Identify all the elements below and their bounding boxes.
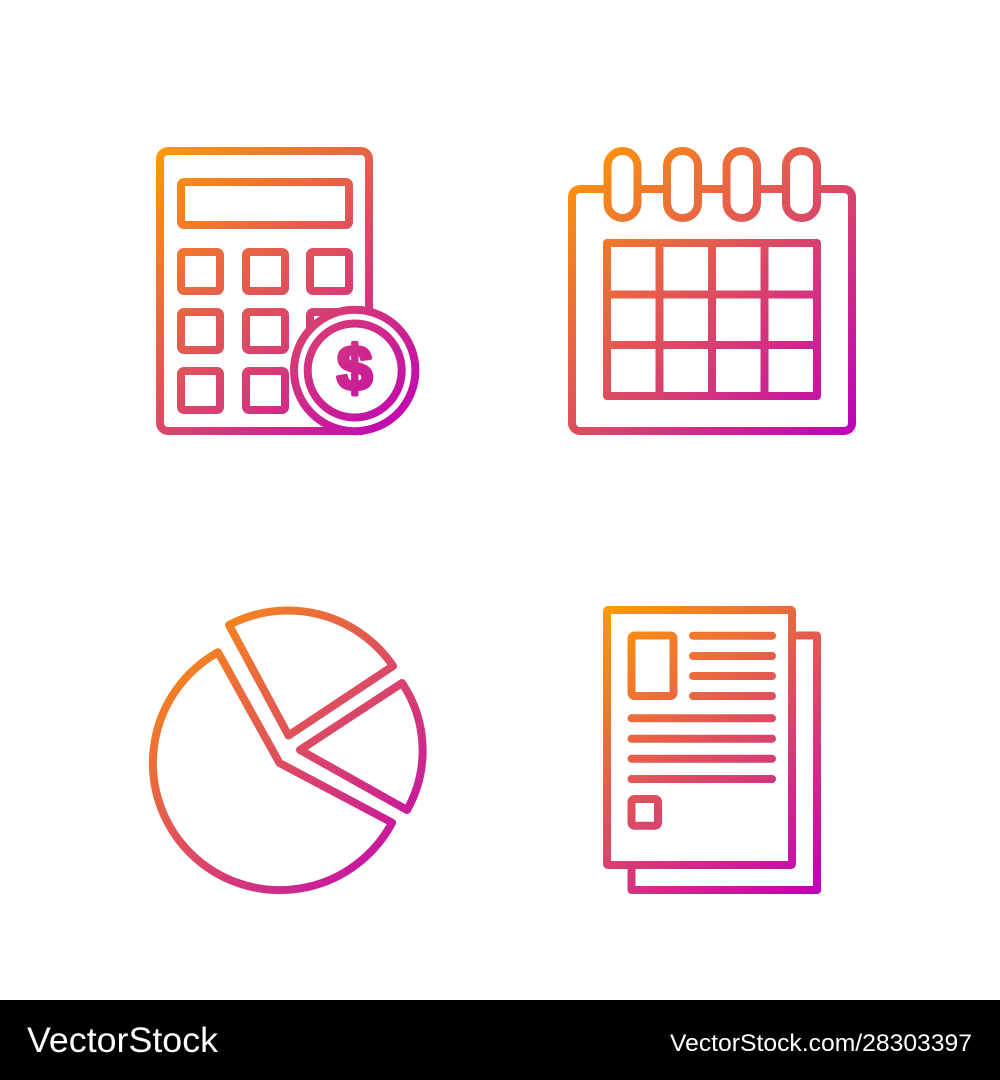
long text lines: [632, 718, 772, 779]
top pie slice: [229, 610, 393, 736]
image id: VectorStock.com/28303397: [670, 1030, 972, 1057]
back page: [632, 636, 817, 890]
photo box: [632, 636, 674, 696]
dollar coin: [294, 310, 415, 431]
calculator body: [160, 151, 369, 431]
large pie slice: [153, 652, 392, 890]
icon: spiral calendar: [572, 151, 852, 431]
calendar date grid: [607, 243, 817, 396]
short text lines: [693, 636, 772, 696]
dollar coin: $: [337, 334, 372, 404]
icon: pie chart: [153, 610, 423, 890]
right pie slice: [300, 683, 423, 810]
brand name: VectorStock: [27, 1021, 219, 1060]
calendar spiral rings: [608, 151, 817, 218]
front page: [607, 610, 792, 865]
calendar page: [572, 189, 852, 431]
footer bar: [0, 1000, 1000, 1080]
small checkbox: [632, 799, 658, 826]
icon: calculator with dollar coin: [160, 151, 415, 431]
calculator keys: [181, 252, 349, 410]
calculator screen: [181, 182, 349, 225]
icon: document pages: [607, 610, 817, 890]
